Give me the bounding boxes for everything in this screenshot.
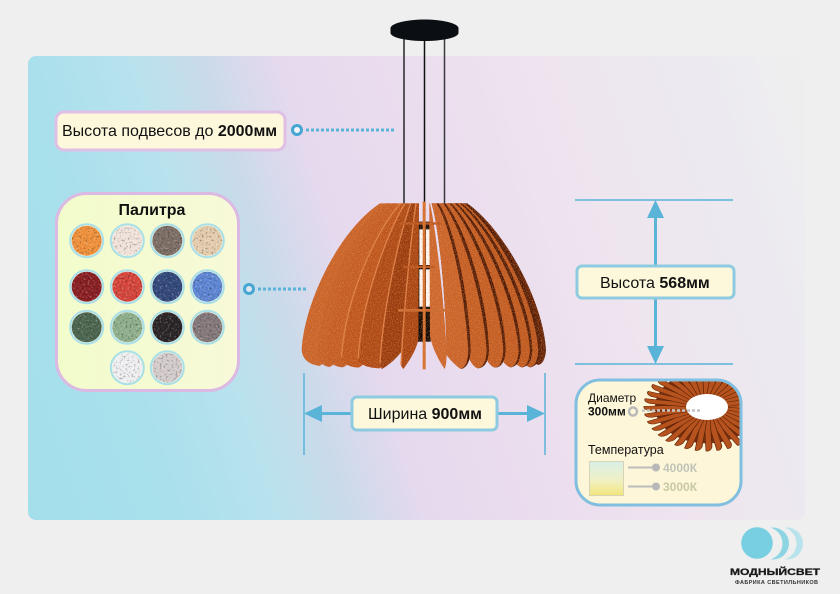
- 4000K option: 4000К: [663, 461, 698, 475]
- colour swatches: [72, 226, 222, 383]
- background panel: [28, 56, 805, 520]
- diameter pointer: [629, 408, 702, 416]
- 3000K option: 3000К: [663, 480, 698, 494]
- 4000K option: [628, 461, 698, 475]
- logo tagline: ФАБРИКА СВЕТИЛЬНИКОВ: [735, 580, 818, 586]
- 3000K option: [628, 480, 698, 494]
- pendant lamp shade: [302, 202, 546, 369]
- logo mark: [741, 527, 803, 560]
- fin highlights: [342, 203, 416, 365]
- ceiling canopy and suspension wires: [390, 20, 458, 206]
- width label: Ширина 900мм: [368, 406, 482, 423]
- temperature swatch: [590, 462, 624, 496]
- height label: Высота 568мм: [600, 275, 710, 292]
- suspension height label: Высота подвесов до 2000мм: [62, 123, 277, 140]
- panel: diameter and temperature card: [574, 378, 742, 506]
- panel: diameter and temperature card: 300мм: [588, 404, 626, 418]
- connector: palette: [244, 284, 306, 294]
- width label: [352, 397, 497, 430]
- left fins: [302, 203, 419, 369]
- diameter text: Диаметр: [588, 391, 637, 405]
- central window: [418, 222, 431, 342]
- logo name: МОДНЫЙСВЕТ: [730, 566, 820, 578]
- suspension height label: [56, 112, 285, 150]
- panel: palette: [56, 194, 238, 390]
- height label: [577, 266, 734, 298]
- width dimension: [304, 373, 545, 455]
- lamp seen from below: [644, 382, 740, 452]
- temperature heading: Температура: [588, 443, 664, 457]
- logo: [730, 527, 820, 586]
- swatch rings: [70, 224, 224, 384]
- connector: suspension height: [292, 126, 395, 134]
- right fins: [429, 203, 546, 369]
- palette heading: Палитра: [119, 202, 186, 219]
- height dimension: [575, 200, 734, 364]
- cross bars and central rib: [398, 202, 450, 369]
